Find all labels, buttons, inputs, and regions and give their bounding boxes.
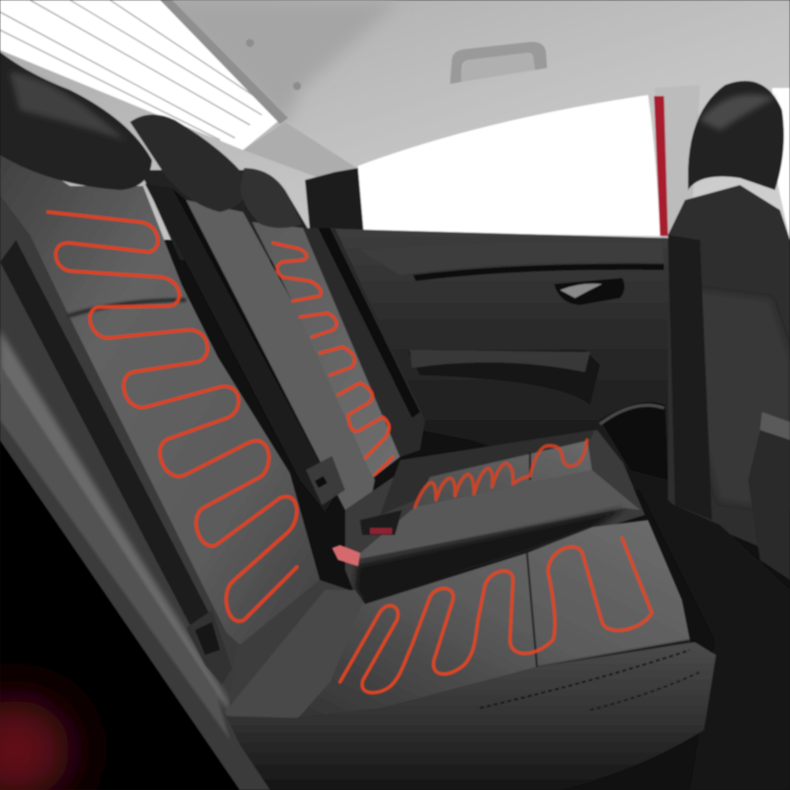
right bolster and centre belt [303,228,425,457]
red belt tab [332,545,360,566]
right window sliver [772,88,790,240]
black door foreground lower left [0,420,240,790]
door armrest [408,350,600,405]
side window [358,95,660,236]
seat belt buckle middle [306,456,345,505]
door handle [554,278,625,305]
middle seat back panel [252,222,400,478]
B pillar and right trim [655,85,700,240]
heater coil: rear bench cushion [415,440,587,507]
front seat [668,81,790,580]
dark pillar beside window [305,168,364,236]
heater coil: front cushion [340,538,652,693]
floor [640,490,790,790]
rear window with defroster lines [0,0,288,150]
front seat side control [760,412,790,440]
rear door panel [305,228,672,510]
heater coil: middle seat back [273,243,393,475]
ceiling grab handle [450,42,547,84]
seat belt receivers [360,510,402,535]
front lip of cushion [226,642,716,790]
headrest right [240,168,302,228]
rear bench cushion [345,430,645,600]
front cushion top surface [298,520,690,718]
outer bolster [0,190,280,790]
headrest middle [130,114,248,212]
inner seat belt strap [145,184,345,512]
ceiling [0,0,790,240]
heater coil: main seat back [48,212,297,621]
red glow bottom left [0,700,70,790]
main seat back fabric panel [0,140,320,645]
outer seat belt [0,240,210,625]
dark crease band [355,508,625,605]
front headrest [688,81,784,190]
dark backing behind headrests [140,170,320,260]
seam shadow in panel [68,300,186,316]
middle bolster [186,200,375,510]
headrest left [0,52,152,190]
C pillar trim [243,122,360,190]
cushion shadow at seam [537,640,700,680]
seat belt buckle left [186,610,232,685]
lower bolster fill under seat back [228,580,350,716]
side cushion bolster [225,590,366,740]
red car body through door gap [654,96,668,236]
